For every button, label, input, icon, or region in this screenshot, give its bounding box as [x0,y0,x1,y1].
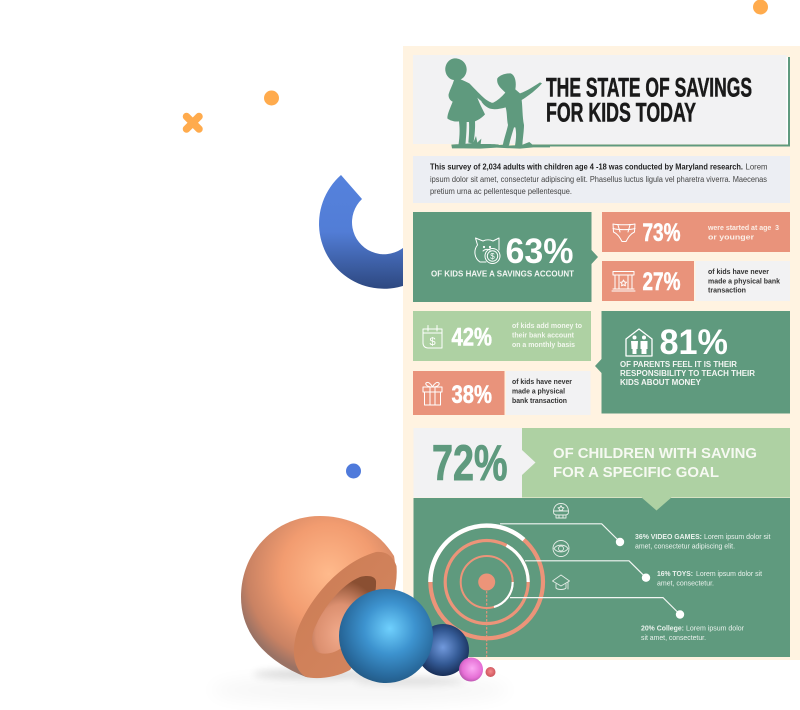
orange cut sphere [241,516,397,678]
blue sphere [339,589,433,683]
panel: survey description: pretium urna ac pellentesque pellentesque. [430,187,572,196]
text: college: 20% College: [641,624,684,632]
panel: 42% monthly deposits [413,311,591,361]
panel: infographic background [403,46,800,660]
text: video games: Lorem ipsum dolor sit [704,532,770,541]
panel: savings goals breakdown [414,497,790,657]
icon: toys [553,540,569,556]
panel: title banner [413,55,790,149]
caption [620,359,756,387]
panel: survey description: Lorem [746,162,768,172]
boy [481,73,542,146]
heading [553,446,757,481]
description: were started at age 3 [707,223,779,232]
icon: calendar with dollar: $ [429,336,436,348]
pink sphere [459,658,483,682]
description: of kids add money to [512,321,583,330]
text: college: Lorem ipsum dolor [686,624,744,632]
panel: 72% savings goal header [414,428,790,498]
text: toys: amet, consectetur. [657,578,714,588]
text: toys [657,569,762,588]
description: of kids have never [512,377,572,386]
icon: graduation cap [552,575,570,590]
illustration: children silhouette [445,58,550,149]
description: their bank account [512,330,575,340]
value: 27%: 27% [642,268,680,296]
panel: survey description [413,156,790,203]
description: of kids have never [708,267,769,276]
icon: video games [554,504,568,518]
text: toys: Lorem ipsum dolor sit [696,569,762,578]
panel: survey description: This survey of 2,034 adults with children age 4 -18 was conducted by Maryland research. [430,162,743,172]
caption: RESPONSIBILITY TO TEACH THEIR [620,368,756,378]
connector: video games [500,524,624,546]
description [512,377,572,405]
description [708,267,781,294]
description: or younger [708,232,754,241]
navy sphere [417,624,469,676]
red sphere [486,667,496,677]
value: 72%: 72% [432,435,508,491]
ground and grass [451,136,550,149]
description [512,321,583,349]
text: college: sit amet, consectetur. [641,633,706,642]
value: 42%: 42% [452,324,492,352]
icon: gift [423,382,442,405]
decoration: top orange dot [753,0,768,14]
description: made a physical [512,386,565,396]
description: bank transaction [512,396,567,405]
description: transaction [708,286,746,294]
chart: concentric ring chart [430,526,543,657]
value: 81%: 81% [660,323,728,362]
icon: piggy bank [475,238,500,264]
caption: KIDS ABOUT MONEY [620,377,701,387]
decoration: blue ring segment [319,175,449,289]
text: video games: amet, consectetur adipiscing elit. [635,542,735,550]
icon: bank [612,272,635,291]
text: toys: 16% TOYS: [657,569,693,578]
panel: 81% parents responsibility [595,311,790,414]
text: video games [635,532,770,550]
panel: 63% savings account [413,212,598,302]
panel: 38% bank transaction [413,371,590,415]
description: made a physical bank [708,276,781,286]
icon: diaper [613,224,635,242]
panel: survey description: ipsum dolor sit amet, consectetur adipiscing elit. Phasellus luctus ligula vel pharetra viverra. Maecenas [430,175,767,184]
caption: OF KIDS HAVE A SAVINGS ACCOUNT [431,268,575,278]
connector: toys [525,561,650,582]
title text: FOR KIDS TODAY [546,98,696,128]
description: on a monthly basis [512,340,575,349]
panel: 27% bank transaction [602,261,790,301]
text: college [641,624,744,642]
caption: OF PARENTS FEEL IT IS THEIR [620,359,738,369]
heading: OF CHILDREN WITH SAVING [553,446,757,462]
panel: 73% started at age 3 [602,212,790,252]
arrow: pointer into breakdown [641,497,672,510]
value: 63%: 63% [506,232,574,271]
decoration: blue dot [346,464,361,478]
decoration: orange cross [186,116,199,129]
decoration: orange dot [264,90,279,106]
value: 38%: 38% [452,381,492,409]
text: video games: 36% VIDEO GAMES: [635,532,702,541]
icon: piggy bank: $ [490,252,495,261]
description [707,223,779,241]
connector: college [510,598,684,619]
title text [546,72,752,128]
illustration: 3D spheres [210,516,510,704]
value: 73%: 73% [642,219,680,247]
heading: FOR A SPECIFIC GOAL [553,465,719,481]
girl [445,58,492,146]
icon: house with family [626,329,652,356]
icon: calendar with dollar [423,326,442,348]
